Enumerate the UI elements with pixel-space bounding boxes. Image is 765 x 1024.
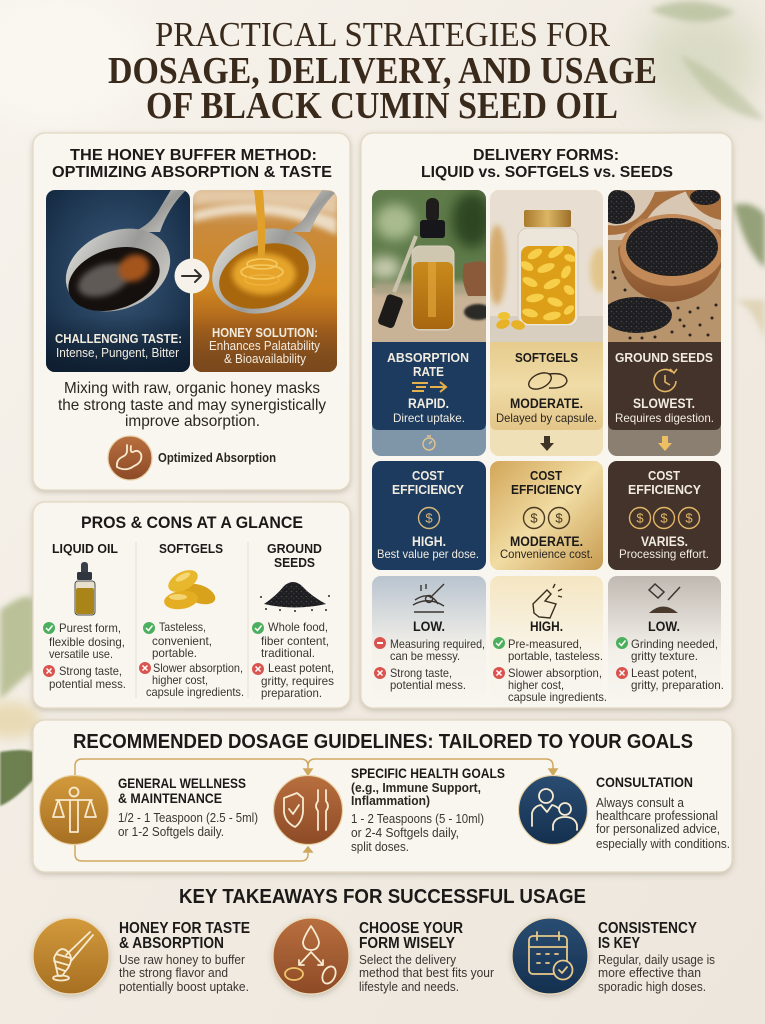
text: choose your form: lifestyle and needs. — [359, 979, 459, 994]
photo: softgel jar — [488, 190, 610, 342]
text: ground seeds pros and cons — [252, 620, 334, 700]
label: honey solution: & Bioavailability — [224, 352, 307, 366]
icon: one coin: $ — [425, 510, 433, 526]
icon: down arrow gold — [658, 436, 672, 451]
text: softgel convenience notes: Pre-measured, — [508, 637, 582, 651]
card: cost efficiency softgels: Convenience cost. — [500, 547, 593, 561]
text: softgel convenience notes: portable, tasteless. — [508, 649, 603, 663]
text: mixing with honey: the strong taste and may synergistically — [58, 397, 326, 414]
card: cost efficiency liquid: Best value per dose. — [377, 547, 479, 561]
text: ground seeds pros and cons: traditional. — [261, 646, 315, 660]
photo: spoon with honey — [193, 190, 337, 372]
text: softgel convenience notes: capsule ingredients. — [508, 690, 607, 704]
card: convenience softgels — [490, 576, 607, 704]
icon: drop and capsules — [273, 918, 349, 994]
card: convenience liquid: LOW. — [413, 619, 445, 634]
column: ground seeds — [252, 541, 334, 700]
text: consistency is key: Regular, daily usage is — [598, 952, 715, 967]
text: liquid convenience notes: Measuring required, — [390, 637, 485, 651]
card: absorption rate: Direct uptake. — [393, 411, 465, 425]
label: challenging taste — [56, 334, 181, 360]
text: ground seeds pros and cons: Whole food, — [268, 620, 328, 634]
text: consultation: CONSULTATION — [596, 774, 693, 790]
icon: messy spoon — [413, 584, 444, 612]
text: seeds convenience notes — [616, 637, 724, 692]
text: softgels pros and cons: capsule ingredients. — [146, 685, 244, 699]
text: general wellness: or 1-2 Softgels daily. — [118, 824, 224, 839]
label: optimized absorption: Optimized Absorption — [158, 451, 276, 465]
card: seeds rate: SLOWEST. — [633, 396, 695, 411]
text: softgels pros and cons: portable. — [152, 646, 197, 660]
text: softgels pros and cons: Slower absorption, — [153, 661, 243, 675]
column: ground seeds: GROUND — [267, 541, 322, 556]
card: cost efficiency softgels: EFFICIENCY — [511, 482, 582, 497]
card: cost efficiency softgels — [490, 461, 603, 570]
icon: two coins: $ — [530, 510, 538, 526]
card: absorption rate — [372, 342, 486, 450]
text: ground seeds pros and cons: gritty, requires — [261, 674, 334, 688]
text: choose your form: method that best fits your — [359, 965, 495, 980]
text: honey for taste: the strong flavor and — [119, 965, 228, 980]
card: cost efficiency seeds: EFFICIENCY — [628, 482, 701, 497]
text: ground seeds pros and cons: preparation. — [261, 686, 322, 700]
panel: pros and cons — [33, 502, 350, 708]
icon: softgel capsules — [163, 566, 218, 611]
text: mixing with honey: Mixing with raw, organic honey masks — [64, 380, 320, 397]
text: liquid convenience notes — [374, 637, 485, 692]
panel: delivery forms — [361, 133, 732, 708]
icon: doctor and patient — [518, 776, 588, 844]
heading: honey buffer — [52, 147, 332, 181]
card: softgels rate: SOFTGELS — [515, 350, 578, 365]
icon: two coins: $ — [555, 510, 563, 526]
heading: honey buffer: OPTIMIZING ABSORPTION & TASTE — [52, 164, 332, 181]
text: consultation: Always consult a — [596, 795, 685, 810]
text: honey for taste — [119, 920, 250, 994]
icon: stomach — [108, 436, 152, 480]
text: honey for taste: & ABSORPTION — [119, 935, 224, 952]
column: softgels: SOFTGELS — [159, 541, 223, 556]
column: ground seeds: SEEDS — [274, 555, 315, 570]
card: cost efficiency softgels: COST — [530, 468, 562, 483]
text: general wellness: 1/2 - 1 Teaspoon (2.5 - 5ml) — [118, 810, 258, 825]
card: convenience seeds — [608, 576, 724, 701]
text: liquid oil pros and cons: Purest form, — [59, 621, 121, 635]
card: convenience softgels: HIGH. — [530, 619, 563, 634]
panel: honey buffer method — [33, 133, 350, 490]
text: mixing with honey — [58, 380, 326, 430]
card: absorption rate: RAPID. — [408, 396, 449, 411]
column: softgel absorption card — [488, 190, 610, 456]
panel: dosage guidelines — [33, 720, 732, 872]
text: seeds convenience notes: Grinding needed, — [631, 637, 718, 651]
text: consultation: for personalized advice, — [596, 821, 720, 836]
text: consistency is key — [598, 920, 715, 994]
text: ground seeds pros and cons: Least potent, — [268, 661, 334, 675]
text: liquid oil pros and cons: Strong taste, — [59, 664, 122, 678]
card: softgels rate: Delayed by capsule. — [496, 411, 597, 425]
icon: grinding seeds — [649, 584, 680, 613]
text: seeds convenience notes: gritty, preparation. — [631, 678, 724, 692]
heading: delivery forms: DELIVERY FORMS: — [473, 147, 619, 164]
text: specific health goals: (e.g., Immune Support, — [351, 780, 481, 795]
text: consultation: especially with conditions. — [596, 836, 730, 851]
text: ground seeds pros and cons: fiber content, — [261, 634, 329, 648]
text: general wellness: GENERAL WELLNESS — [118, 775, 246, 791]
text: general wellness — [118, 775, 258, 839]
text: consistency is key: CONSISTENCY — [598, 920, 698, 937]
title — [108, 15, 657, 127]
text: liquid oil pros and cons: versatile use. — [49, 647, 113, 661]
heading: delivery forms: LIQUID vs. SOFTGELS vs. SEEDS — [421, 164, 673, 181]
text: mixing with honey: improve absorption. — [125, 413, 260, 430]
icon: pointing hand — [533, 584, 562, 618]
card: cost efficiency liquid — [372, 461, 486, 570]
text: softgels pros and cons: higher cost, — [152, 673, 208, 687]
icon: two coins — [524, 508, 570, 528]
photo: spoon of black seed oil — [46, 188, 190, 372]
text: choose your form: FORM WISELY — [359, 935, 456, 952]
card: convenience seeds: LOW. — [648, 619, 680, 634]
text: softgel convenience notes — [493, 637, 607, 704]
icon: three coins: $ — [685, 510, 693, 526]
text: liquid oil pros and cons: flexible dosing, — [49, 635, 125, 649]
heading: dosage guidelines: RECOMMENDED DOSAGE GUIDELINES: TAILORED TO YOUR GOALS — [73, 731, 693, 753]
text: specific health goals: Inflammation) — [351, 793, 430, 808]
label: challenging taste: Intense, Pungent, Bitter — [56, 346, 179, 360]
text: general wellness: & MAINTENANCE — [118, 790, 222, 806]
column: softgels — [139, 541, 244, 699]
icon: honey dipper — [33, 918, 109, 994]
heading: honey buffer: THE HONEY BUFFER METHOD: — [70, 147, 317, 164]
text: honey for taste: Use raw honey to buffer — [119, 952, 246, 967]
text: consistency is key: sporadic high doses. — [598, 979, 706, 994]
text: liquid oil pros and cons — [43, 621, 126, 691]
card: cost efficiency seeds: VARIES. — [641, 534, 688, 549]
card: seeds rate — [608, 342, 721, 451]
text: specific health goals: split doses. — [351, 839, 409, 854]
card: cost efficiency softgels: MODERATE. — [510, 534, 583, 549]
text: choose your form: CHOOSE YOUR — [359, 920, 463, 937]
text: liquid convenience notes: potential mess. — [390, 678, 466, 692]
icon: three coins: $ — [636, 510, 644, 526]
label: challenging taste: CHALLENGING TASTE: — [55, 332, 182, 346]
icon: stopwatch — [423, 436, 435, 450]
card: absorption rate: RATE — [413, 364, 444, 379]
photo: dropper bottle — [369, 190, 492, 342]
text: liquid oil pros and cons: potential mess. — [49, 677, 126, 691]
icon: capsules outline — [528, 372, 568, 390]
heading: key takeaways: KEY TAKEAWAYS FOR SUCCESSFUL USAGE — [179, 886, 586, 908]
text: seeds convenience notes: Least potent, — [631, 666, 697, 680]
column: liquid oil — [43, 541, 126, 691]
text: liquid convenience notes: Strong taste, — [390, 666, 452, 680]
text: consistency is key: IS KEY — [598, 935, 641, 952]
card: absorption rate: ABSORPTION — [387, 350, 469, 365]
icon: shield and joint — [274, 776, 342, 844]
column: liquid oil: LIQUID OIL — [52, 541, 118, 556]
title: DOSAGE, DELIVERY, AND USAGE — [108, 50, 657, 92]
title: OF BLACK CUMIN SEED OIL — [146, 85, 618, 127]
heading: pros and cons: PROS & CONS AT A GLANCE — [81, 513, 303, 532]
text: choose your form — [359, 920, 495, 994]
icon: clock — [654, 369, 677, 391]
text: consultation: healthcare professional — [596, 808, 718, 823]
text: softgel convenience notes: higher cost, — [508, 678, 564, 692]
text: choose your form: Select the delivery — [359, 952, 457, 967]
heading: delivery forms — [421, 147, 673, 181]
card: cost efficiency liquid: COST — [412, 468, 444, 483]
text: softgel convenience notes: Slower absorption, — [508, 666, 602, 680]
column: seeds absorption card — [599, 189, 724, 456]
text: specific health goals — [351, 765, 505, 854]
card: cost efficiency liquid: HIGH. — [412, 534, 446, 549]
text: softgels pros and cons: convenient, — [152, 634, 212, 648]
card: softgels rate — [490, 342, 603, 451]
text: liquid convenience notes: can be messy. — [390, 649, 460, 663]
arrows: dosage flow — [75, 759, 557, 861]
column: liquid absorption card — [369, 190, 492, 456]
card: seeds rate: GROUND SEEDS — [615, 350, 713, 365]
text: specific health goals: SPECIFIC HEALTH GOALS — [351, 765, 505, 781]
text: consistency is key: more effective than — [598, 965, 701, 980]
icon: three coins — [630, 508, 700, 528]
icon: calendar check — [512, 918, 588, 994]
text: seeds convenience notes: gritty texture. — [631, 649, 698, 663]
takeaway: consistency — [512, 918, 715, 994]
label: honey solution — [209, 326, 321, 366]
photo: seeds in bowl — [608, 190, 721, 342]
text: honey for taste: potentially boost uptake. — [119, 979, 249, 994]
card: cost efficiency seeds — [608, 461, 721, 570]
text: softgels pros and cons — [139, 620, 244, 699]
card: cost efficiency seeds: COST — [648, 468, 680, 483]
icon: seed pile — [260, 582, 330, 612]
card: softgels rate: MODERATE. — [510, 396, 583, 411]
icon: dropper bottle — [75, 562, 95, 615]
icon: down arrow dark — [540, 436, 554, 451]
text: consultation — [596, 774, 730, 851]
icon: balance figure — [40, 776, 108, 844]
takeaway: honey — [33, 918, 250, 994]
text: softgels pros and cons: Tasteless, — [159, 620, 206, 634]
icon: fast arrow — [412, 382, 446, 392]
arrow: taste to honey — [174, 258, 210, 294]
card: convenience liquid — [372, 576, 486, 701]
takeaway: choose form — [273, 918, 495, 994]
card: cost efficiency seeds: Processing effort. — [619, 547, 709, 561]
label: honey solution: HONEY SOLUTION: — [212, 326, 318, 340]
text: honey for taste: HONEY FOR TASTE — [119, 920, 250, 937]
label: honey solution: Enhances Palatability — [209, 339, 321, 353]
title: PRACTICAL STRATEGIES FOR — [155, 15, 611, 54]
text: specific health goals: 1 - 2 Teaspoons (5 - 10ml) — [351, 811, 484, 826]
text: specific health goals: or 2-4 Softgels daily, — [351, 825, 459, 840]
icon: three coins: $ — [660, 510, 668, 526]
card: cost efficiency liquid: EFFICIENCY — [392, 482, 464, 497]
card: seeds rate: Requires digestion. — [615, 411, 714, 425]
